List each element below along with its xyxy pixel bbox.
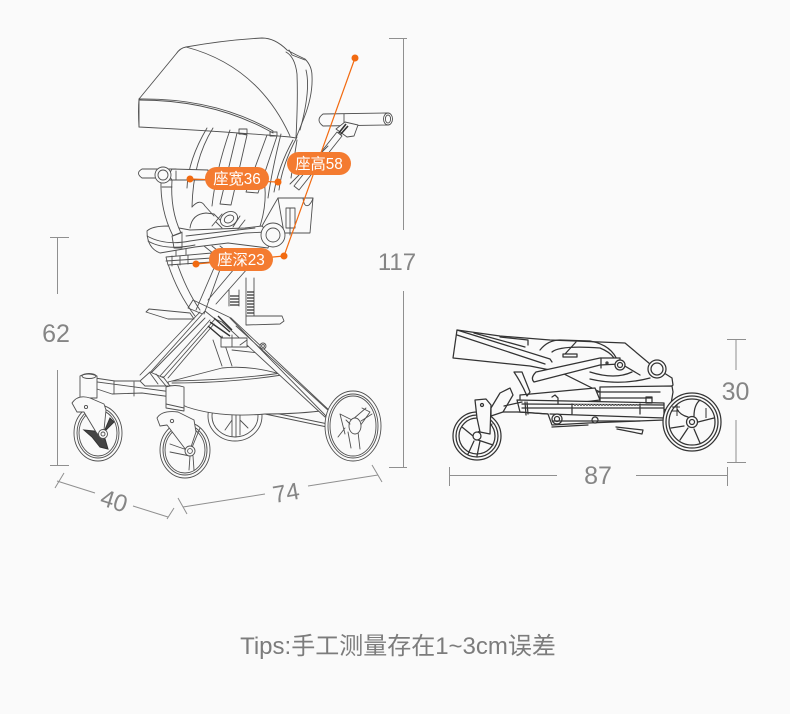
- label: seat height 58: 座高58: [295, 156, 343, 173]
- dimension: length 74: [178, 465, 382, 514]
- caster housing right: [166, 386, 184, 411]
- illustration: unfolded stroller: [72, 38, 392, 478]
- front frame struts: [140, 260, 248, 378]
- canopy: [138, 38, 312, 138]
- folded chassis: [514, 372, 673, 434]
- seat and armrest bar: [138, 167, 285, 253]
- dimension: height 62: [42, 237, 70, 466]
- label: seat depth 23: [209, 248, 273, 271]
- lower frame rear strut: [213, 336, 328, 427]
- dimension: folded height 30: 30: [722, 378, 749, 406]
- dimension: width 40: 40: [97, 485, 131, 518]
- front axle rail: [88, 372, 172, 397]
- orange measure lines: [186, 54, 358, 268]
- dimension: folded length 87: 87: [584, 462, 612, 490]
- folded fork and front wheel: [453, 388, 528, 460]
- front right wheel: [157, 412, 210, 478]
- rear right wheel: [325, 391, 381, 461]
- dimension: width 40: [55, 473, 174, 519]
- rear left wheel: [208, 391, 262, 441]
- dimension: total height 117: 117: [378, 249, 416, 276]
- dimension: height 62: 62: [42, 320, 70, 348]
- illustration: folded stroller: [453, 330, 721, 460]
- folded rear wheel: [663, 393, 721, 451]
- label: seat height 58: [287, 152, 351, 175]
- rear push handle: [290, 113, 392, 190]
- tips note: Tips:手工测量存在1~3cm误差: [240, 633, 556, 660]
- cup holder: [278, 198, 313, 235]
- seat back and straps: [187, 128, 297, 232]
- caster housing left: [80, 374, 97, 398]
- label: seat width 36: [205, 167, 269, 190]
- footrest and springs: [146, 278, 284, 347]
- dimension: folded length 87: [450, 462, 728, 490]
- seat footbar and mounting: [166, 246, 230, 266]
- label: seat width 36: 座宽36: [213, 171, 261, 188]
- dimension: total height 117: [378, 38, 416, 468]
- dimension: folded height 30: [722, 339, 749, 462]
- dimension: length 74: 74: [271, 478, 302, 509]
- folded main tube: [532, 358, 666, 382]
- main diagonal frame: [188, 300, 331, 417]
- label: seat depth 23: 座深23: [217, 252, 265, 269]
- folded canopy and top body: [453, 330, 673, 392]
- basket: [168, 367, 328, 415]
- front left wheel: [72, 397, 122, 461]
